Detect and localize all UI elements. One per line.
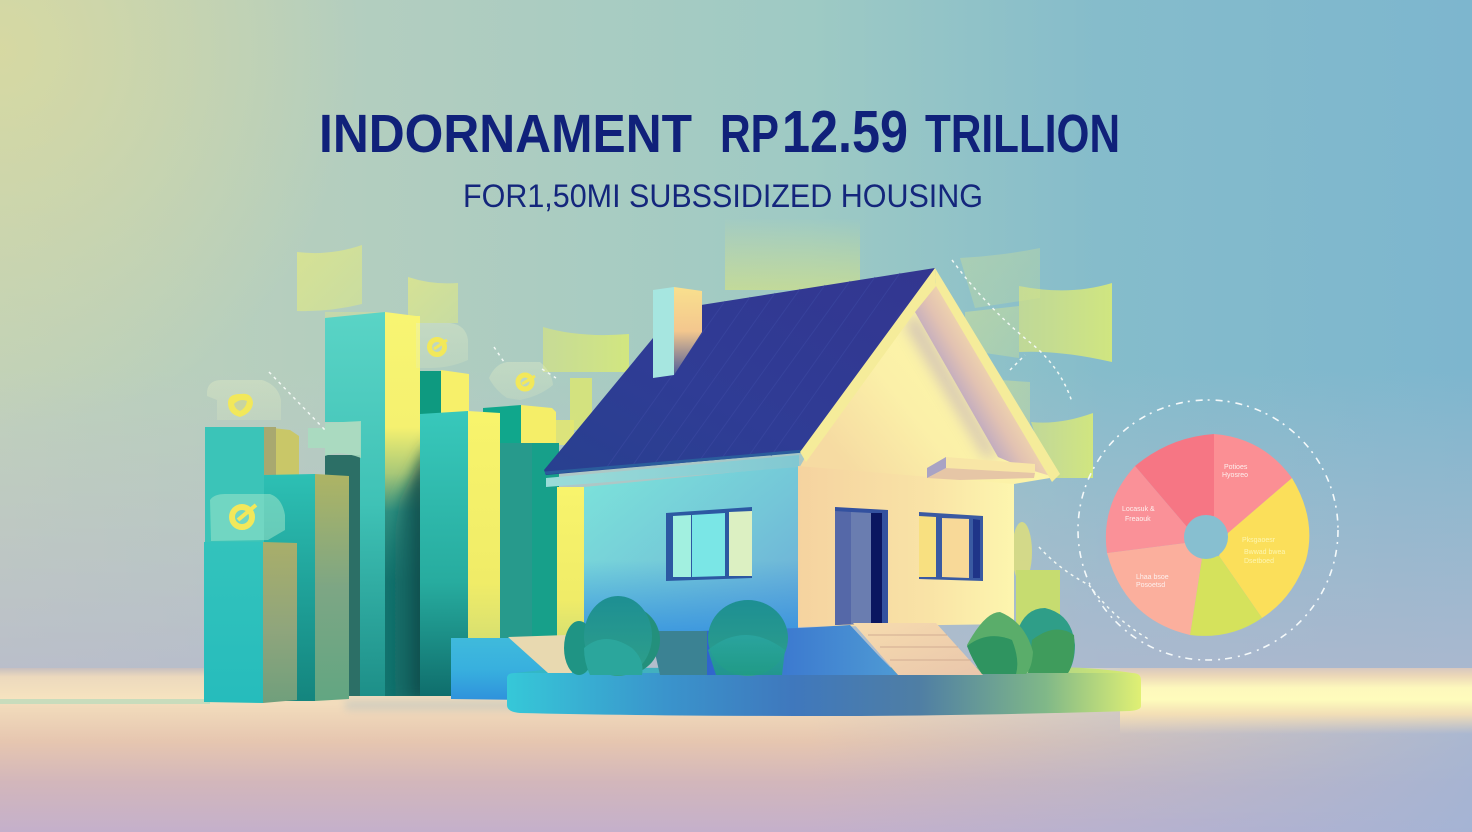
white dashed trails [269,260,1150,640]
icon: heart badge 2 [210,494,285,541]
gable inner shadow [905,312,998,457]
title: RP [720,104,779,164]
bush middle [708,600,788,676]
title [319,99,1120,165]
slice rose [1106,466,1187,553]
lower right backing shapes [1012,522,1060,625]
gable wall [798,285,1050,490]
bar chart [204,312,592,703]
pie labels: Potioes [1224,464,1248,471]
pie labels: Pksgaoesr [1242,537,1276,544]
pie labels [1122,464,1285,589]
pie labels: Posoetsd [1136,582,1165,589]
platform body [507,673,1141,716]
second bar [264,474,349,701]
icon: heart badge 4 [489,362,553,400]
pie labels: Bwwad bwea [1244,549,1285,556]
gable trim [800,268,1060,482]
back bars [483,378,592,643]
dark small bar [416,370,469,415]
front left bar [204,542,297,703]
slice pink [1214,434,1292,533]
gable underside [915,283,1054,477]
slice red [1135,434,1214,527]
slice lime [1190,556,1262,636]
pie labels: Locasuk & [1122,506,1155,513]
platform top [515,667,1132,673]
pie labels: Dsetboed [1244,558,1274,565]
yellow strip by house [557,487,584,637]
eave fascia [546,455,799,487]
left window [666,507,752,581]
background floating panels [297,218,1112,478]
middle bar [420,411,500,696]
front steps [853,623,983,675]
house [508,268,1075,676]
title: INDORNAMENT [319,104,692,164]
pie labels: Freaouk [1125,516,1151,523]
subtitle: FOR1,50MI SUBSSIDIZED HOUSING [463,178,983,214]
roof [544,268,935,475]
canopy [927,457,1035,480]
dashed ring [1078,400,1338,660]
slice yellow [1219,478,1309,618]
icon: heart badge 3 [416,323,468,368]
bush left [564,596,660,676]
icon: heart badge 1 [207,380,281,420]
slice salmon [1107,543,1202,635]
lower wall [798,466,1014,627]
title: 12.59 [782,99,908,165]
pie chart [1078,400,1338,660]
center hole [1184,515,1228,559]
left bar upper [205,427,299,547]
door [835,507,888,625]
pie labels: Hyosreo [1222,472,1248,479]
pie labels: Lhaa bsoe [1136,574,1169,581]
title: TRILLION [925,104,1120,164]
chimney [653,287,702,378]
ground left steps [508,635,572,673]
bush right [967,608,1075,674]
left wall [584,466,798,640]
blue block [451,638,549,700]
tall bar [308,312,430,700]
right window [919,512,983,581]
ground right [650,625,898,675]
platform [451,638,1141,716]
